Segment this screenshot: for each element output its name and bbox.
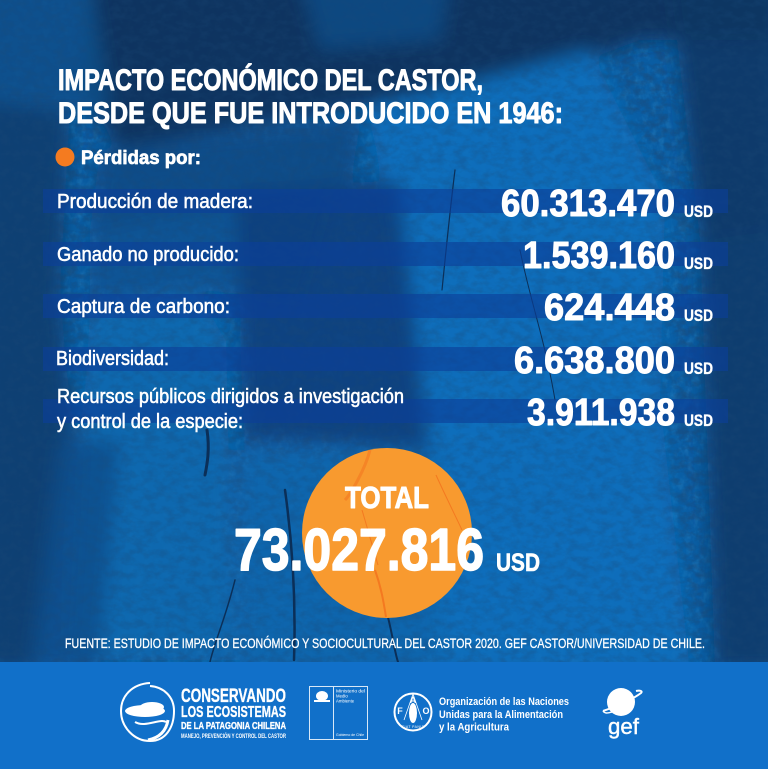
logo: ministerio del medio ambiente: Ministerio del (336, 688, 365, 694)
logo: FAO: O (422, 706, 430, 716)
total callout (234, 448, 540, 618)
logo: conservando los ecosistemas: LOS ECOSISTEMAS (181, 704, 286, 721)
subheading: pérdidas por: Pérdidas por: (81, 148, 201, 169)
total callout: TOTAL (345, 480, 429, 515)
logo: gef: gef (608, 714, 640, 739)
logo: FAO (394, 694, 569, 734)
logo: FAO: y la Agricultura (439, 722, 510, 734)
row: producción de madera: 60.313.470 (501, 183, 675, 225)
logo: ministerio del medio ambiente: Ambiente (336, 698, 355, 704)
row: producción de madera: Producción de madera: (57, 191, 253, 213)
logo: ministerio del medio ambiente (310, 686, 368, 740)
row: biodiversidad (56, 340, 713, 382)
row: biodiversidad: 6.638.800 (514, 340, 675, 382)
title (58, 63, 563, 130)
row: producción de madera: USD (684, 202, 713, 221)
row: recursos públicos (57, 386, 713, 434)
title: DESDE QUE FUE INTRODUCIDO EN 1946: (58, 97, 563, 130)
row: ganado no producido (57, 235, 713, 277)
row: ganado no producido: USD (684, 254, 713, 273)
logo: conservando los ecosistemas: MANEJO, PREVENCIÓN Y CONTROL DEL CASTOR (181, 731, 286, 740)
row: captura de carbono: Captura de carbono: (57, 296, 230, 318)
total callout: 73.027.816 (234, 517, 484, 583)
row: ganado no producido: Ganado no producido: (57, 244, 239, 266)
logo: conservando los ecosistemas (121, 683, 286, 741)
row: biodiversidad: Biodiversidad: (56, 348, 169, 370)
title: IMPACTO ECONÓMICO DEL CASTOR, (58, 63, 483, 97)
row highlight bands (43, 189, 728, 423)
row: captura de carbono (57, 287, 713, 329)
logo: ministerio del medio ambiente: Medio (336, 694, 348, 698)
row: ganado no producido: 1.539.160 (523, 235, 675, 277)
logo: FAO: Organización de las Naciones (439, 696, 569, 708)
row: captura de carbono: USD (684, 306, 713, 325)
logo: FAO: Unidas para la Alimentación (439, 709, 563, 721)
logo: ministerio del medio ambiente: Gobierno de Chile (336, 733, 364, 737)
row: biodiversidad: USD (684, 359, 713, 378)
footer bar (0, 662, 768, 769)
row: producción de madera (57, 183, 713, 225)
logo: conservando los ecosistemas: CONSERVANDO (181, 686, 286, 707)
row: captura de carbono: 624.448 (544, 287, 675, 329)
total callout: USD (496, 549, 540, 577)
logo: FAO: FIAT PANIS (402, 725, 425, 729)
logo: gef (603, 688, 642, 739)
logo: FAO: F (397, 706, 403, 716)
row: recursos públicos: y control de la especie: (57, 411, 243, 433)
row: recursos públicos: Recursos públicos dirigidos a investigación (57, 386, 404, 408)
row: recursos públicos: 3.911.938 (527, 392, 675, 434)
logo: FAO: A (410, 695, 417, 705)
logo: conservando los ecosistemas: DE LA PATAGONIA CHILENA (181, 720, 286, 732)
row: recursos públicos: USD (684, 411, 713, 430)
